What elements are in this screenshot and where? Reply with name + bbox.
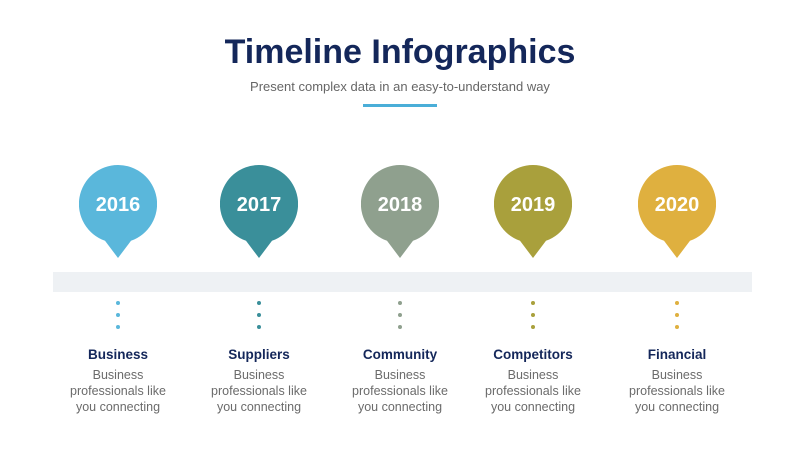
pin 2019 [494,165,572,258]
description: you connecting [635,400,719,414]
description: Business [375,368,425,382]
dots [257,301,261,329]
pin 2016: 2016 [96,194,140,216]
item: 2018 [352,165,448,414]
pin 2016 [79,165,157,258]
description: professionals like [485,384,581,398]
description [352,368,448,414]
heading: Business [88,347,148,362]
accent underline [363,104,437,107]
description: you connecting [217,400,301,414]
title: Timeline Infographics [225,33,575,71]
description: you connecting [358,400,442,414]
subtitle: Present complex data in an easy-to-understand way [250,79,550,94]
description: Business [93,368,143,382]
item: 2019 [485,165,581,414]
description: professionals like [211,384,307,398]
pin 2018: 2018 [378,194,422,216]
description: you connecting [491,400,575,414]
item: 2017 [211,165,307,414]
description: Business [508,368,558,382]
description [70,368,166,414]
description: professionals like [352,384,448,398]
description [485,368,581,414]
pin 2017 [220,165,298,258]
dots [116,301,120,329]
heading: Community [363,347,437,362]
item: 2016 [70,165,166,414]
description: professionals like [70,384,166,398]
pin 2020 [638,165,716,258]
timeline band [53,272,752,292]
pin 2018 [361,165,439,258]
pin 2020: 2020 [655,194,699,216]
heading: Competitors [493,347,573,362]
description: you connecting [76,400,160,414]
pin 2019: 2019 [511,194,555,216]
dots [531,301,535,329]
heading: Suppliers [228,347,290,362]
description [211,368,307,414]
dots [675,301,679,329]
description: professionals like [629,384,725,398]
description: Business [652,368,702,382]
description [629,368,725,414]
heading: Financial [648,347,706,362]
description: Business [234,368,284,382]
item: 2020 [629,165,725,414]
pin 2017: 2017 [237,194,281,216]
dots [398,301,402,329]
